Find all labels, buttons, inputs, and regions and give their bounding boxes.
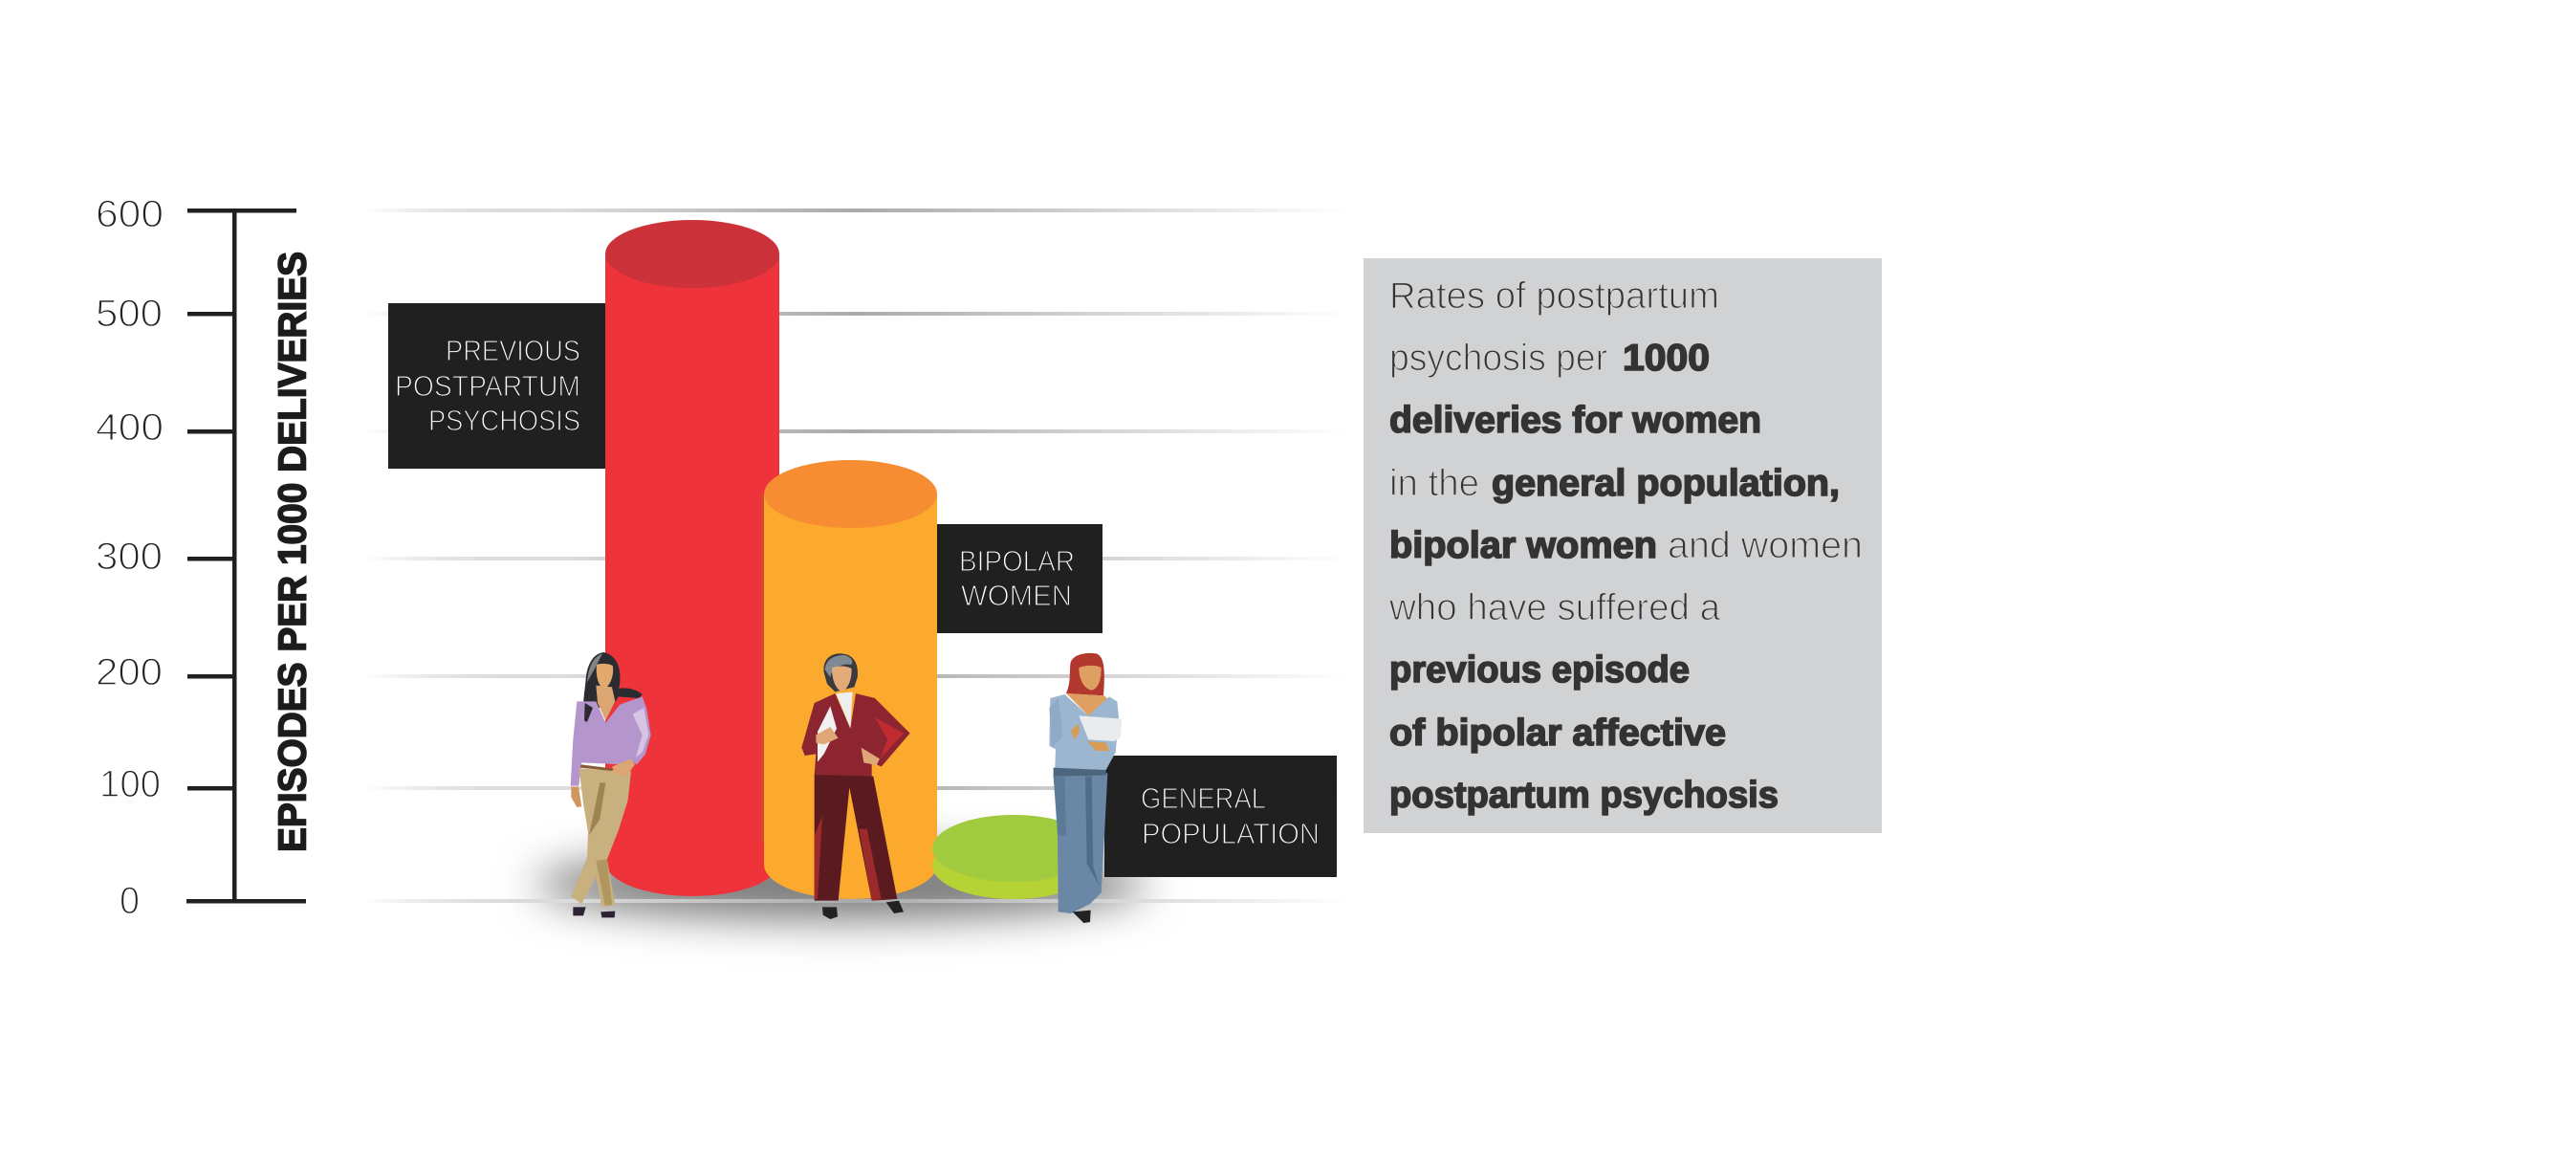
axis numbers: 0 [120,880,140,922]
description text [1388,275,1863,816]
label: general population: POPULATION [1142,817,1320,850]
axis numbers: 300 [96,536,163,578]
description text: of bipolar affective [1389,713,1726,754]
y axis [96,193,306,922]
label: previous postpartum psychosis [388,303,605,469]
description text: and women [1668,525,1863,566]
icon: woman in blue with paper [1049,653,1122,923]
cylinder: previous postpartum psychosis [605,220,779,896]
axis numbers: 100 [99,763,161,805]
label: previous postpartum psychosis: PSYCHOSIS [428,404,580,437]
description text: 1000 [1623,338,1710,379]
gridlines [363,209,1348,903]
floor shadow [535,850,1147,919]
description text: who have suffered a [1388,587,1720,628]
label: previous postpartum psychosis: PREVIOUS [446,334,580,367]
description text: Rates of postpartum [1389,275,1719,317]
description text: postpartum psychosis [1389,775,1779,816]
description text: bipolar women [1389,525,1657,566]
axis numbers: 200 [96,651,163,693]
axis numbers: 600 [96,193,164,235]
description text: deliveries for women [1389,400,1761,441]
description text: in the [1389,463,1479,504]
label: previous postpartum psychosis: POSTPARTUM [395,369,580,403]
icon: woman in burgundy suit [801,653,910,919]
cylinder: bipolar women [761,460,937,899]
label: general population [1104,756,1337,877]
panel: description [1364,258,1882,833]
axis numbers: 500 [96,293,163,335]
description text: general population, [1492,463,1840,504]
label: bipolar women [937,524,1102,633]
axis numbers [96,193,164,922]
icon: woman in lilac sweater [571,652,651,917]
description text: previous episode [1389,649,1690,691]
axis title: EPISODES PER 1000 DELIVERIES [270,252,314,852]
label: bipolar women: BIPOLAR [959,544,1075,578]
description text: psychosis per [1389,338,1607,379]
axis numbers: 400 [96,406,164,449]
label: general population: GENERAL [1141,781,1266,815]
label: bipolar women: WOMEN [961,579,1072,612]
cylinder: general population [932,815,1095,899]
